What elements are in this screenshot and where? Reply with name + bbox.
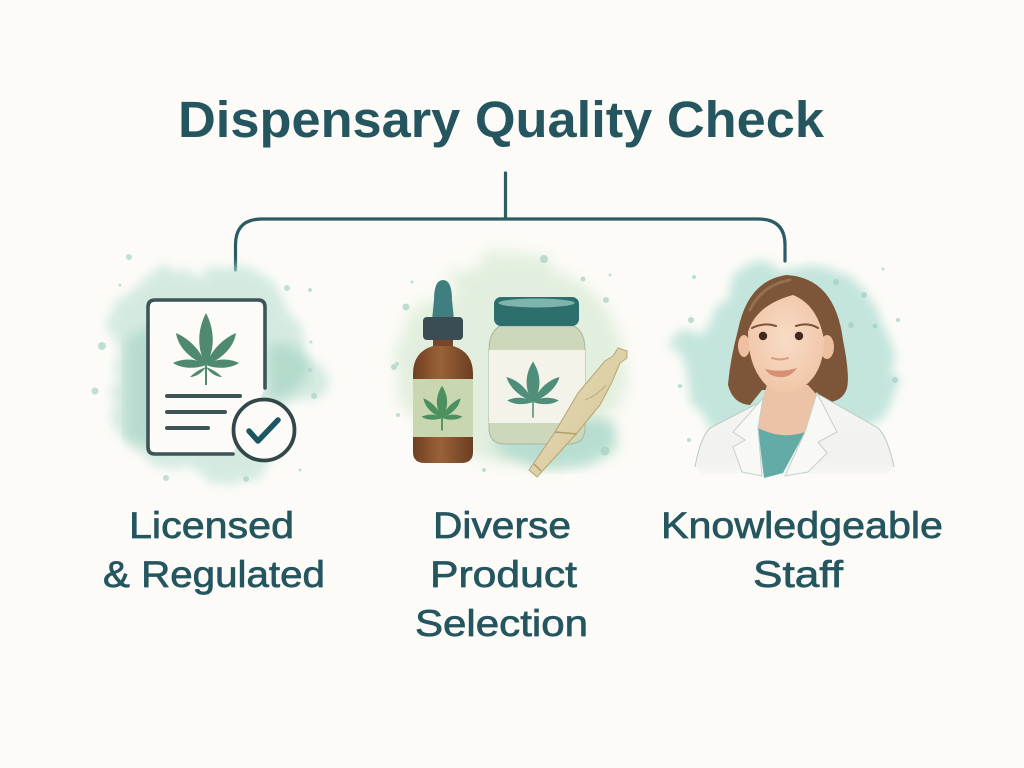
label: knowledgeable staff: Knowledgeable — [661, 505, 943, 546]
watercolor wash: products — [391, 255, 620, 472]
lab coat — [695, 393, 894, 477]
bottle label — [413, 379, 473, 437]
label: knowledgeable staff — [661, 505, 943, 595]
title: Dispensary Quality Check — [178, 91, 825, 148]
icon: dropper bottle — [413, 280, 473, 463]
label: diverse product selection — [415, 505, 588, 644]
shirt — [758, 428, 805, 478]
label: diverse product selection: Selection — [415, 603, 588, 644]
icon: check badge — [234, 400, 294, 460]
panel: diverse product selection — [391, 255, 627, 644]
face — [748, 295, 824, 393]
icon: licence document — [148, 300, 294, 460]
ears — [738, 335, 750, 357]
jar label — [489, 350, 585, 423]
icon: cannabis leaf on document — [173, 313, 239, 385]
label: licensed and regulated: & Regulated — [103, 554, 325, 595]
panel: licensed and regulated — [92, 254, 325, 595]
label: knowledgeable staff: Staff — [753, 554, 844, 595]
label: diverse product selection: Diverse — [433, 505, 571, 546]
neck — [758, 385, 817, 436]
watercolor wash: staff — [678, 262, 900, 445]
bracket connector — [236, 173, 785, 270]
mouth — [765, 368, 797, 377]
eyes and brows — [752, 324, 818, 328]
icon: pre-roll — [529, 348, 627, 477]
panel: knowledgeable staff — [661, 262, 943, 595]
label: licensed and regulated: Licensed — [129, 505, 294, 546]
hair — [728, 275, 848, 405]
icon: jar — [489, 297, 585, 444]
document text lines — [167, 396, 240, 428]
coat lapels — [733, 398, 763, 476]
icon: bottle leaf — [422, 386, 462, 430]
icon: jar leaf — [506, 361, 560, 418]
watercolor wash: licensed — [92, 254, 318, 482]
jar lid — [494, 297, 579, 326]
nose — [772, 358, 788, 360]
label: licensed and regulated — [103, 505, 325, 595]
illustration: staff member — [695, 275, 894, 478]
label: diverse product selection: Product — [430, 554, 578, 595]
